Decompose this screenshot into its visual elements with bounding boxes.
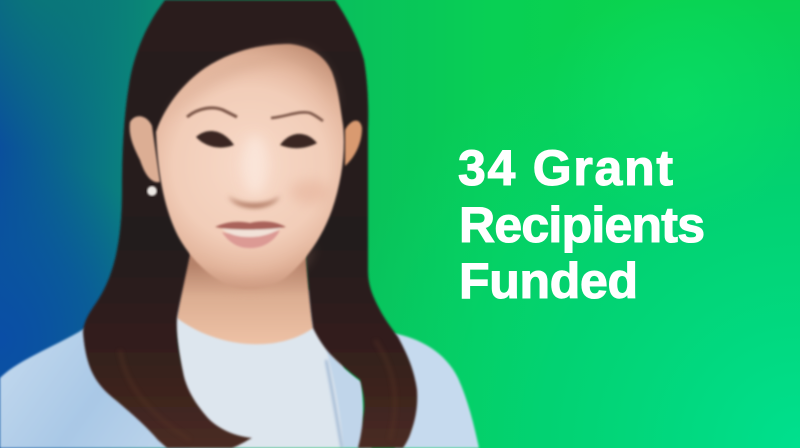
forehead shadow	[165, 48, 338, 120]
hair	[83, 0, 417, 448]
title: Recipients	[459, 197, 705, 253]
hair highlights	[120, 340, 395, 440]
title: 34 Grant	[458, 140, 673, 196]
earring	[147, 186, 157, 196]
right eyebrow	[271, 112, 323, 121]
lower lip	[222, 230, 280, 248]
left sweater	[0, 325, 200, 448]
chin shadow	[190, 245, 315, 289]
nose highlight	[242, 135, 268, 195]
left eye	[196, 131, 234, 148]
inner sweater strip	[326, 348, 365, 448]
teeth	[222, 227, 283, 237]
upper lip	[215, 221, 286, 230]
left ear	[130, 116, 160, 182]
portrait	[0, 0, 479, 448]
clothing	[0, 290, 479, 448]
right eye	[280, 134, 317, 148]
left eyebrow	[187, 108, 237, 117]
cheek blush	[290, 180, 330, 204]
white top	[170, 290, 372, 448]
title: Funded	[459, 253, 638, 309]
right ear	[345, 121, 362, 166]
facial shading	[165, 48, 338, 289]
face	[156, 44, 344, 289]
nose	[228, 196, 280, 208]
title	[458, 140, 705, 309]
right sweater	[392, 333, 479, 448]
facial features	[187, 108, 323, 248]
neck	[177, 240, 313, 344]
